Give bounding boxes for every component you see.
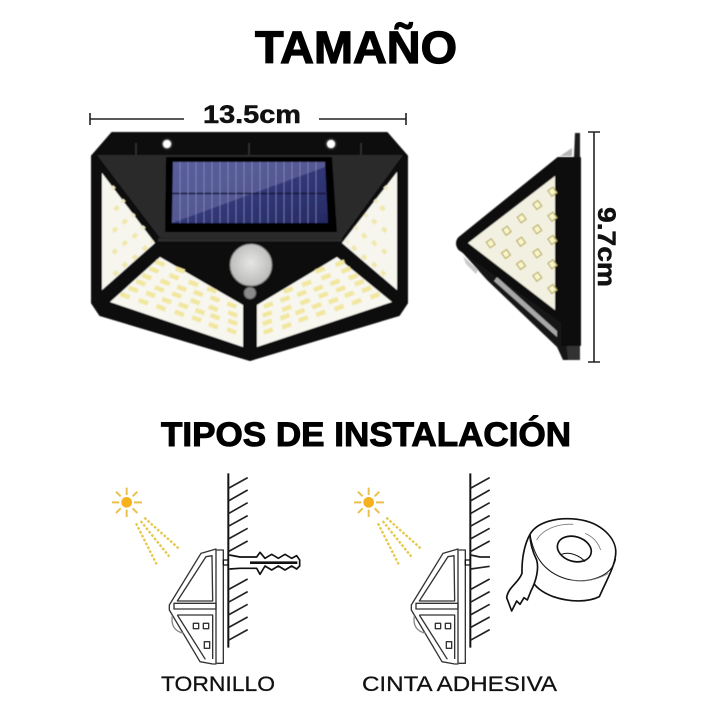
height dimension: 9.7cm [588,132,620,362]
installation diagram: adhesive tape [354,473,616,664]
icon: tape roll [507,519,616,611]
wall [467,473,473,648]
mounting holes [162,139,336,149]
sun rays [136,518,179,566]
LED panel: right [342,172,397,290]
product front view: solar lamp [92,133,407,360]
icon: sun [112,488,142,517]
wall anchor screw [229,552,300,574]
installation diagram: screw [112,473,300,664]
label: cinta adhesiva: CINTA ADHESIVA [362,673,557,696]
LED panel: bottom right [257,257,392,347]
wall [225,473,231,648]
sun rays [378,518,421,566]
icon: sun [354,488,384,517]
width dimension: 13.5cm: 13.5cm [203,101,301,129]
title: tamaño: TAMAÑO [255,22,457,73]
lamp outline [411,549,470,664]
product side view [457,133,580,360]
lamp body [92,133,407,360]
height dimension: 9.7cm: 9.7cm [592,207,620,287]
lamp outline [169,549,228,664]
heading: tipos de instalación: TIPOS DE INSTALACIÓN [161,416,571,454]
LED panel: bottom left [110,257,243,347]
motion sensor [230,244,272,286]
light sensor [244,287,256,299]
LED panel: left [102,173,155,290]
LED face [468,176,555,310]
width dimension: 13.5cm [90,101,406,129]
main frame [457,158,580,345]
solar panel [165,157,337,232]
mounting tab [574,133,580,157]
lower housing [462,252,580,360]
label: tornillo: TORNILLO [161,673,275,696]
